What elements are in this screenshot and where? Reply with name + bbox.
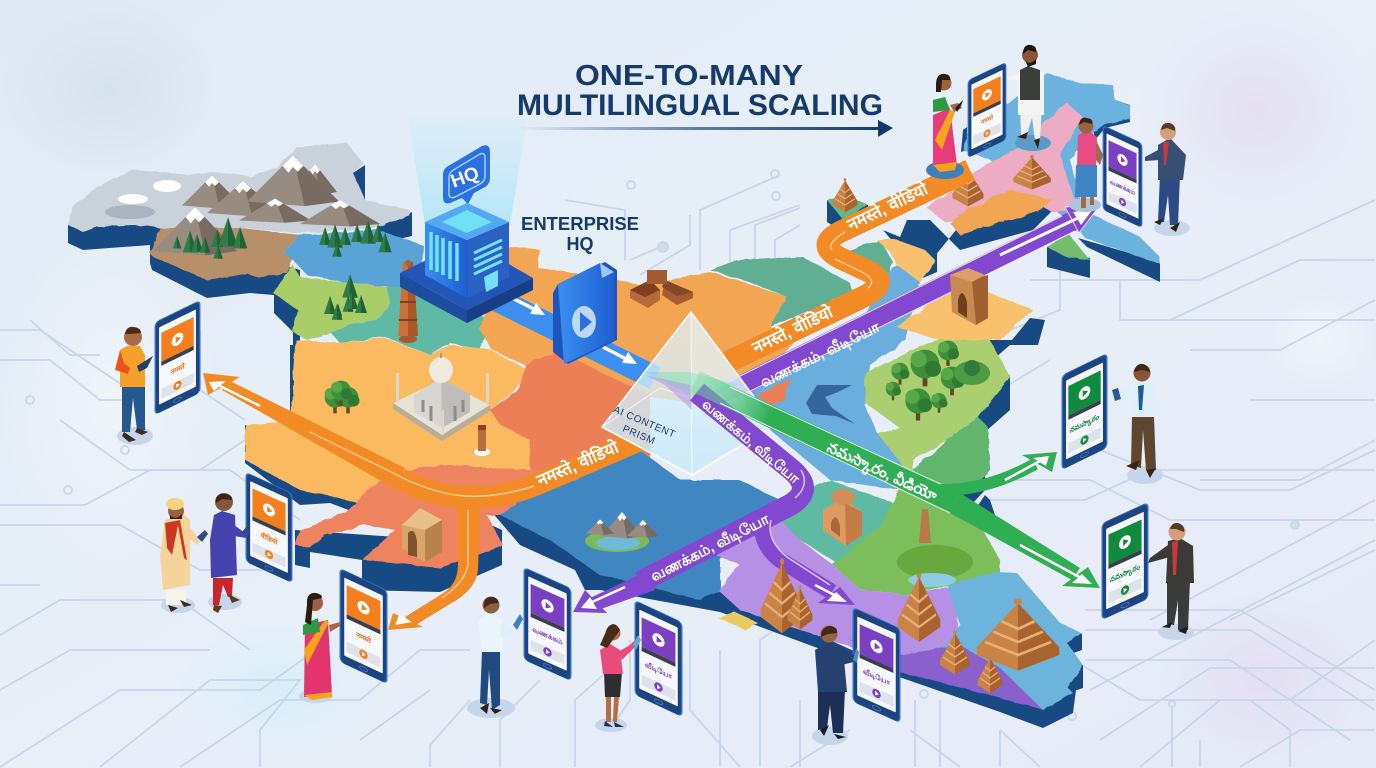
band: blue source stream [492,297,655,378]
monument: India gate west [402,508,442,562]
monument: temples south [761,558,1059,693]
region: east green [865,340,1010,478]
band: purple north stream [712,205,1100,410]
region: green hills [273,265,390,340]
phone: purple three: வீடியோ [863,667,890,687]
AI content prism: PRISM [621,424,657,447]
band: orange west stream [203,373,640,630]
region: east dark green [913,417,990,490]
band labels: வணக்கம், வீடியோ [648,510,773,585]
person: white shirt man [467,596,523,718]
band labels: नमस्ते, वीडियो [843,178,931,235]
monument: gate centre [823,489,862,546]
HQ building [400,145,533,323]
monument: qutub minar [398,260,418,343]
phone: orange north: नमस्ते [980,113,994,127]
region: coral spot [757,378,790,405]
monument: pillar [474,425,490,456]
person: dark suit man [1148,523,1194,640]
monument: hill with tower [897,509,973,587]
region: north-east orange [950,190,1052,235]
person: light blue shirt man [1112,364,1163,484]
region: small green east [1047,232,1090,260]
region: teal east [710,257,853,327]
label: enterprise HQ: ENTERPRISE [521,214,639,234]
band labels: नमस्ते, वीडियो [533,436,622,491]
icon: video document [553,262,617,364]
circuit lines [0,170,1375,767]
person: pink blouse woman [595,624,641,732]
region: yellow plains [245,338,530,505]
phone: purple one: வணக்கம் [532,625,563,647]
phone: green south-east [1102,502,1148,620]
band: purple south stream [573,392,855,613]
monument: gate north-east [950,268,988,325]
person: blue kurta man [208,493,250,613]
region: teal south [770,480,900,565]
band labels: नमस्ते, वीडियो [748,301,836,358]
band labels: வணக்கம், வீடியோ [699,396,804,488]
label: enterprise HQ: HQ [566,234,594,254]
region: brown plateau [150,228,300,280]
label: enterprise HQ [521,214,639,254]
phone: orange left: नमस्ते [169,361,185,377]
HQ beam [405,100,530,225]
region: yellow east [897,290,1033,340]
phone: orange west [246,472,292,583]
phone: green south-east: నమస్కారం [1110,562,1140,585]
region: Himalayan north [68,143,410,233]
icon: monuments over bands [402,268,1059,693]
icon: tree cluster on plains [325,381,360,413]
region: south light blue [940,572,1083,710]
band labels: నమస్కారం, వీడియో [823,438,941,507]
region: north-east blue [963,73,1160,264]
phone: orange west: वीडियो [260,530,279,547]
region: blue centre east [745,265,920,490]
title: MULTILINGUAL SCALING [517,89,883,122]
map of India [68,73,1160,728]
icon: HQ speech badge [443,145,490,204]
region: teal north strip [850,240,893,282]
region: deep purple coast [850,640,1043,710]
map coast extrusion [68,100,1160,728]
icon: HQ speech badge: HQ [448,163,482,193]
icon: trees east [886,341,990,421]
phone: orange south-west: नमस्ते [355,630,372,646]
icon: dark lake [806,385,855,424]
monument: red fort [630,270,693,308]
phone: orange north [968,62,1006,158]
band: green stream [695,381,1100,588]
region: main blue south [500,450,790,600]
region: small green island [827,195,868,222]
region: coral central [490,350,650,480]
region: coral west [295,465,610,568]
AI content prism: AI CONTENT [611,404,677,441]
monument: Taj Mahal [393,353,490,441]
phone: green east: నమస్కారం [1070,412,1099,436]
phone: purple two: வீடியோ [645,660,672,681]
region: yellow north-east [877,240,935,282]
phone: purple two [635,600,682,717]
person: navy suit man front [812,626,859,745]
phone: orange south-west [340,568,387,684]
icon: lake and mountains [585,512,659,552]
person: woman pink top [1069,118,1103,212]
AI content prism [602,312,775,475]
phone: purple north-east [1103,125,1142,228]
person: saree woman north [926,74,964,179]
region: yellow patch [717,612,757,630]
phone: orange left [155,300,200,415]
monument: temples on north-east [832,155,1051,212]
band labels [533,178,941,585]
person: turban man [160,498,208,613]
phone: purple north-east: வணக்கம் [1110,178,1135,197]
phone: purple three [853,607,900,723]
icon: pine forests [173,217,392,320]
region: south green [833,490,1000,595]
title: ONE-TO-MANY [575,60,803,92]
band labels: வணக்கம், வீடியோ [758,318,884,391]
person: vest man [1008,45,1051,151]
region: south purple [715,510,960,660]
region: north tan [480,247,800,405]
region: teal belt [330,287,490,355]
title [517,60,883,122]
phone: purple one [524,567,571,681]
title arrow [520,120,893,137]
person: orange vest man [115,327,153,445]
band: orange north stream [728,170,970,362]
phone: green east [1062,353,1107,470]
person: saree woman south-west [299,593,340,703]
region: blue valley [283,230,423,290]
icon: mountains [105,156,380,255]
person: navy suit man north-east [1145,123,1190,236]
region: north-east pink [927,103,1083,222]
